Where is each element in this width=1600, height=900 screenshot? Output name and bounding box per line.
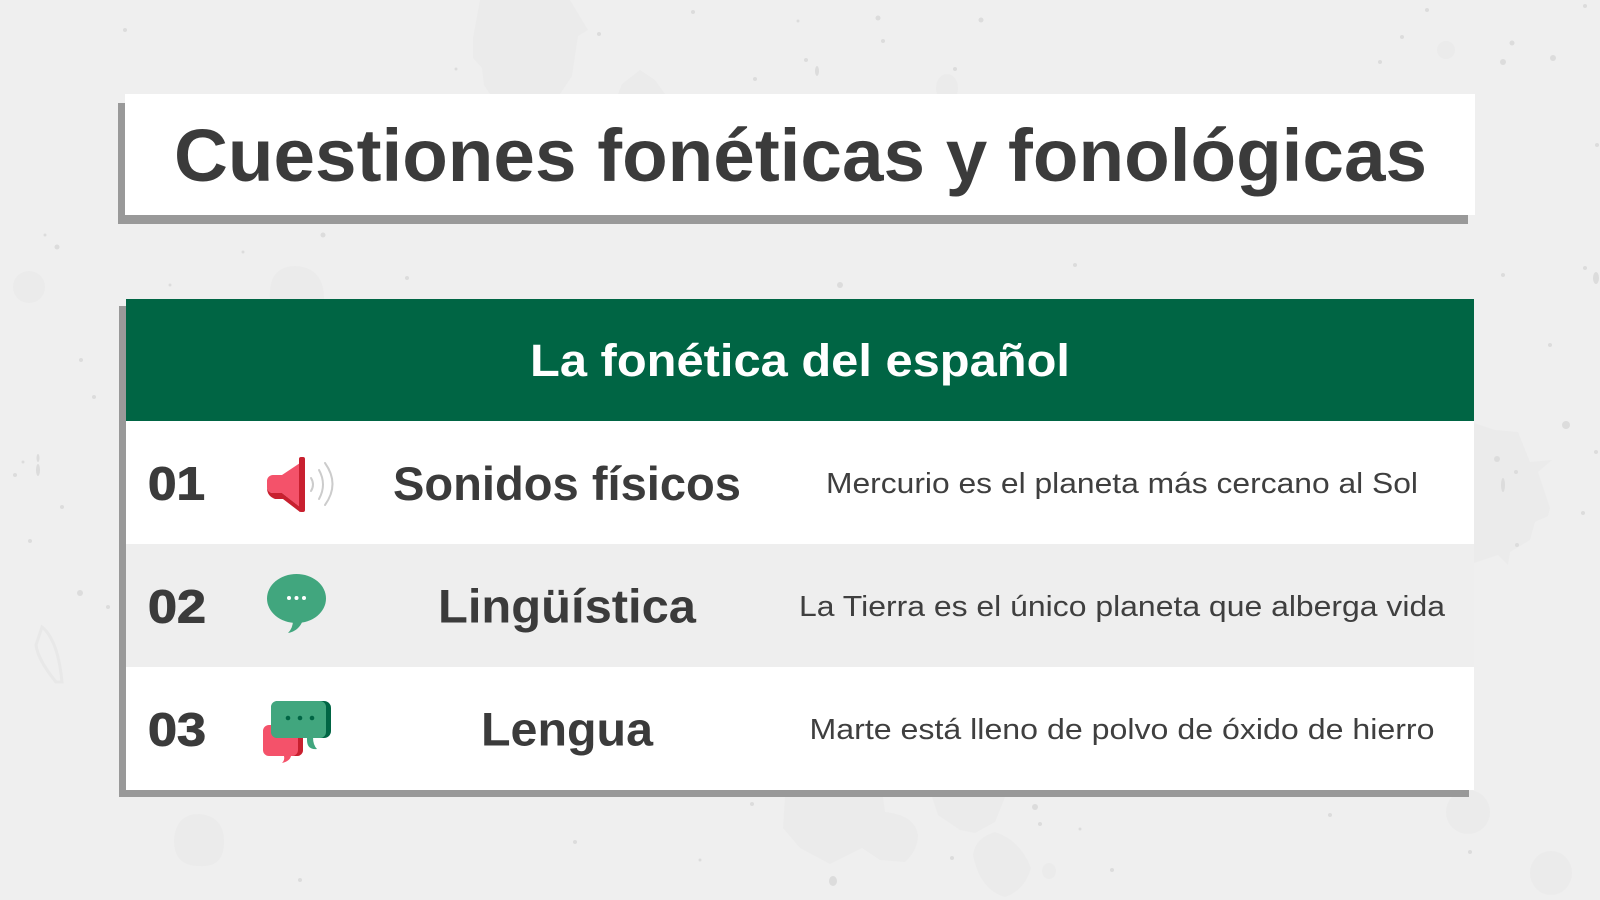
row 3: [148, 701, 1434, 763]
icon: chat bubbles: [263, 701, 331, 763]
row 1: [148, 457, 1418, 512]
row 3: Marte está lleno de polvo de óxido de hierro: [810, 714, 1434, 746]
row 1: Mercurio es el planeta más cercano al Sol: [826, 468, 1418, 500]
faint outlined blot: [36, 627, 62, 682]
table header: [126, 299, 1474, 421]
row 3: 03: [148, 704, 206, 756]
icon: speech bubble: [267, 574, 326, 633]
row 1: 01: [148, 458, 205, 510]
row 2: La Tierra es el único planeta que alberga vida: [799, 591, 1446, 623]
table header: La fonética del español: [530, 335, 1070, 386]
panel: table: [119, 299, 1474, 797]
icon: megaphone: [267, 457, 332, 512]
row 2: [148, 574, 1446, 633]
row 3: Lengua: [481, 702, 654, 756]
row 1: Sonidos físicos: [393, 457, 741, 510]
row 2: Lingüística: [438, 580, 697, 632]
row 2: 02: [148, 580, 206, 632]
title: [118, 94, 1475, 224]
title: Cuestiones fonéticas y fonológicas: [174, 114, 1427, 197]
